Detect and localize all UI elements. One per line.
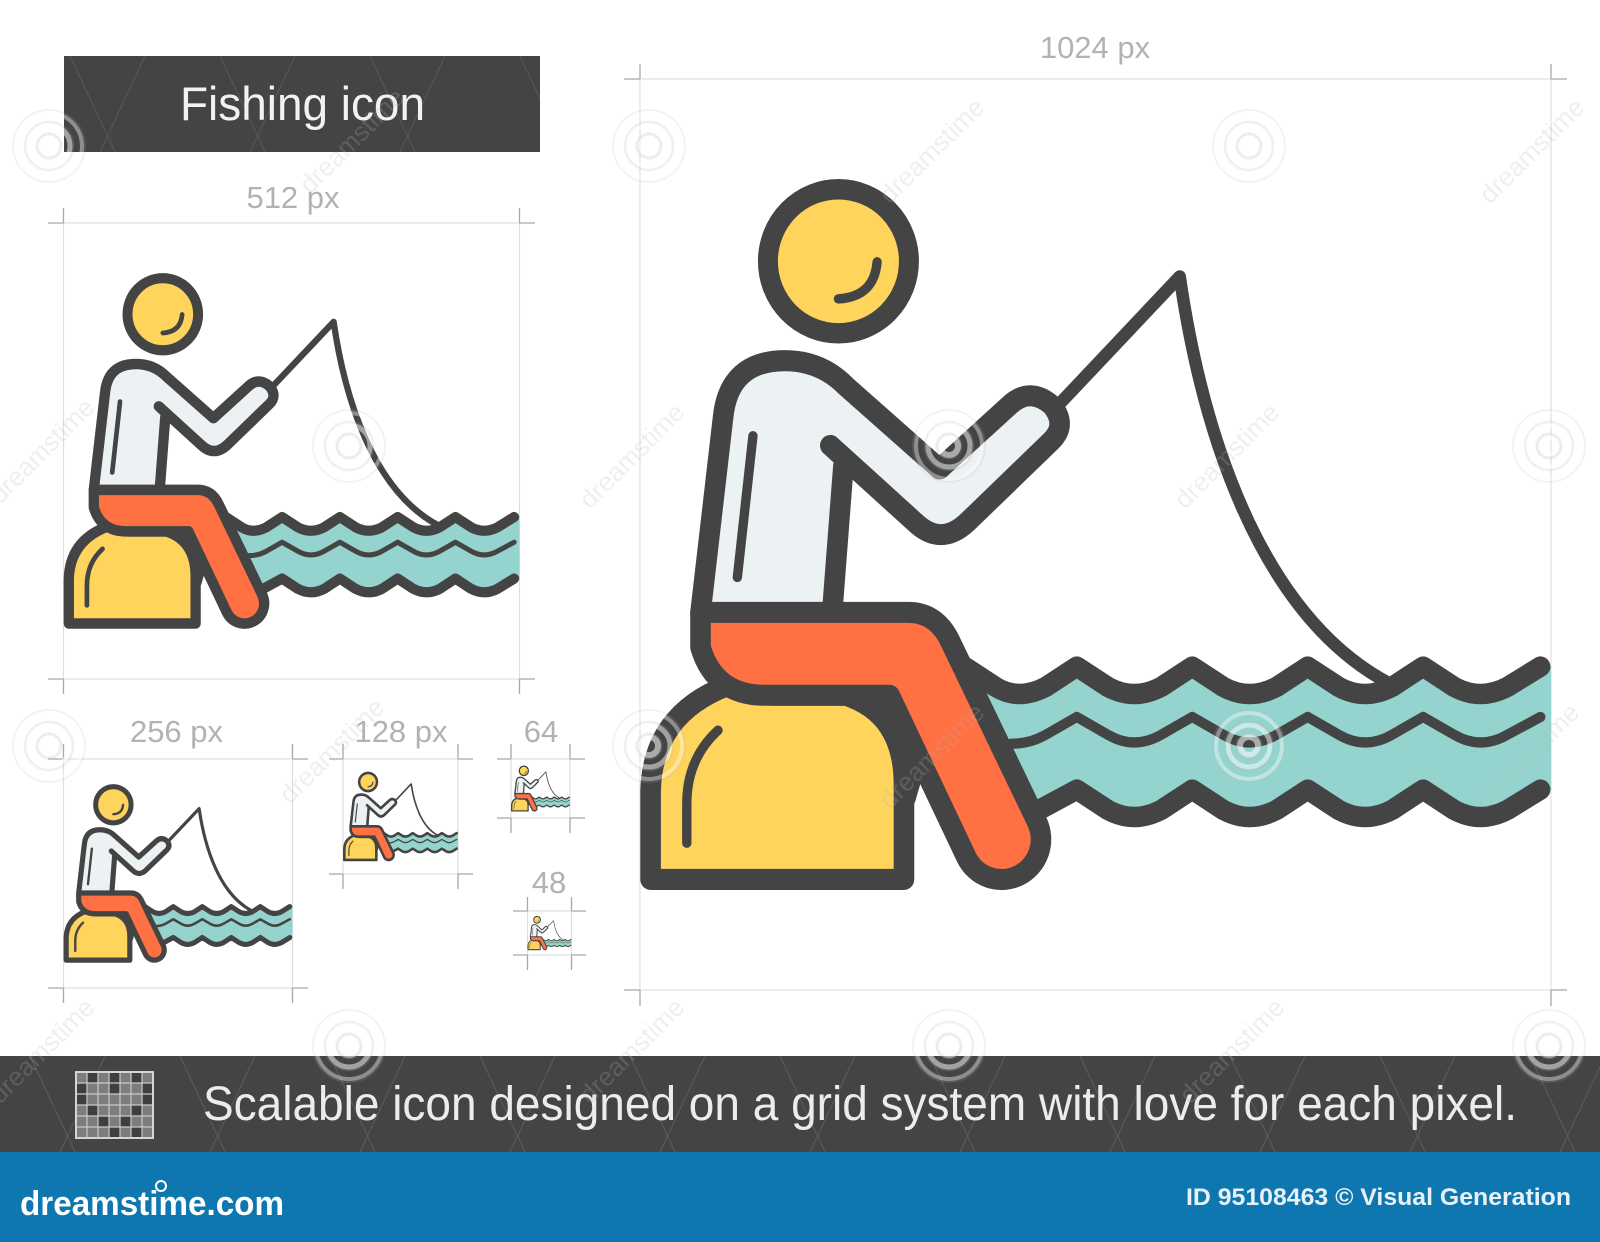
- watermark overlay: dreamstime: [873, 92, 990, 209]
- wave: middle: [1011, 717, 1540, 744]
- panel: 128 px preview: [329, 714, 473, 889]
- label: 512 px: 512 px: [246, 180, 340, 215]
- frame with crop marks: [329, 744, 473, 889]
- label: 48: 48: [532, 865, 566, 900]
- icon: fisherman 512: [69, 278, 519, 624]
- fishing rod and line: [1061, 277, 1388, 683]
- watermark overlay: dreamstime: [273, 692, 390, 809]
- wave: bottom: [1033, 790, 1540, 817]
- label: 1024 px: 1024 px: [1040, 30, 1151, 65]
- label: 64: 64: [524, 714, 558, 749]
- rock: [651, 686, 924, 879]
- water fill: [971, 667, 1551, 816]
- icon: fisherman 1024: [651, 189, 1551, 879]
- watermark overlay: dreamstime: [573, 992, 690, 1109]
- label: 256 px: 256 px: [130, 714, 224, 749]
- panel: 48 px preview: [513, 865, 586, 970]
- panel: 1024 px preview: [624, 30, 1567, 1006]
- frame with crop marks: [48, 744, 308, 1003]
- label: 128 px: 128 px: [354, 714, 448, 749]
- tagline text: Scalable icon designed on a grid system with love for each pixel.: [203, 1078, 1517, 1131]
- icon: fisherman 48: [528, 916, 571, 950]
- title banner: Fishing icon: [180, 77, 425, 130]
- panel: 64 px preview: [497, 714, 585, 833]
- watermark overlay: dreamstime: [873, 697, 990, 814]
- title banner: [64, 56, 540, 152]
- footer bar: credits: [0, 1152, 1600, 1242]
- head: [768, 189, 909, 333]
- watermark overlay: dreamstime: [1468, 697, 1585, 814]
- icon: pixel grid: [76, 1072, 153, 1138]
- icon: fisherman 128: [344, 773, 458, 860]
- wave: top: [964, 667, 1540, 694]
- panel: 256 px preview: [48, 714, 308, 1003]
- frame with crop marks: [513, 897, 586, 970]
- logo: dreamstime.com: dreamstime.com: [20, 1185, 284, 1223]
- icon: fisherman 64: [512, 766, 570, 811]
- image id and author: ID 95108463 © Visual Generation: [1186, 1184, 1571, 1211]
- frame with crop marks: [48, 208, 535, 694]
- icon: fisherman 256: [66, 787, 292, 960]
- legs: [701, 612, 1041, 879]
- frame with crop marks: [497, 744, 585, 833]
- torso and arm: [701, 361, 1060, 612]
- watermark overlay: dreamstime: [1473, 92, 1590, 209]
- frame with crop marks: [624, 64, 1567, 1006]
- watermark overlay: dreamstime: [1168, 397, 1285, 514]
- panel: 512 px preview: [48, 180, 535, 694]
- watermark overlay: dreamstime: [1173, 992, 1290, 1109]
- watermark overlay: dreamstime: [293, 82, 410, 199]
- watermark overlay: dreamstime: [573, 397, 690, 514]
- footer bar: tagline: [0, 1056, 1600, 1152]
